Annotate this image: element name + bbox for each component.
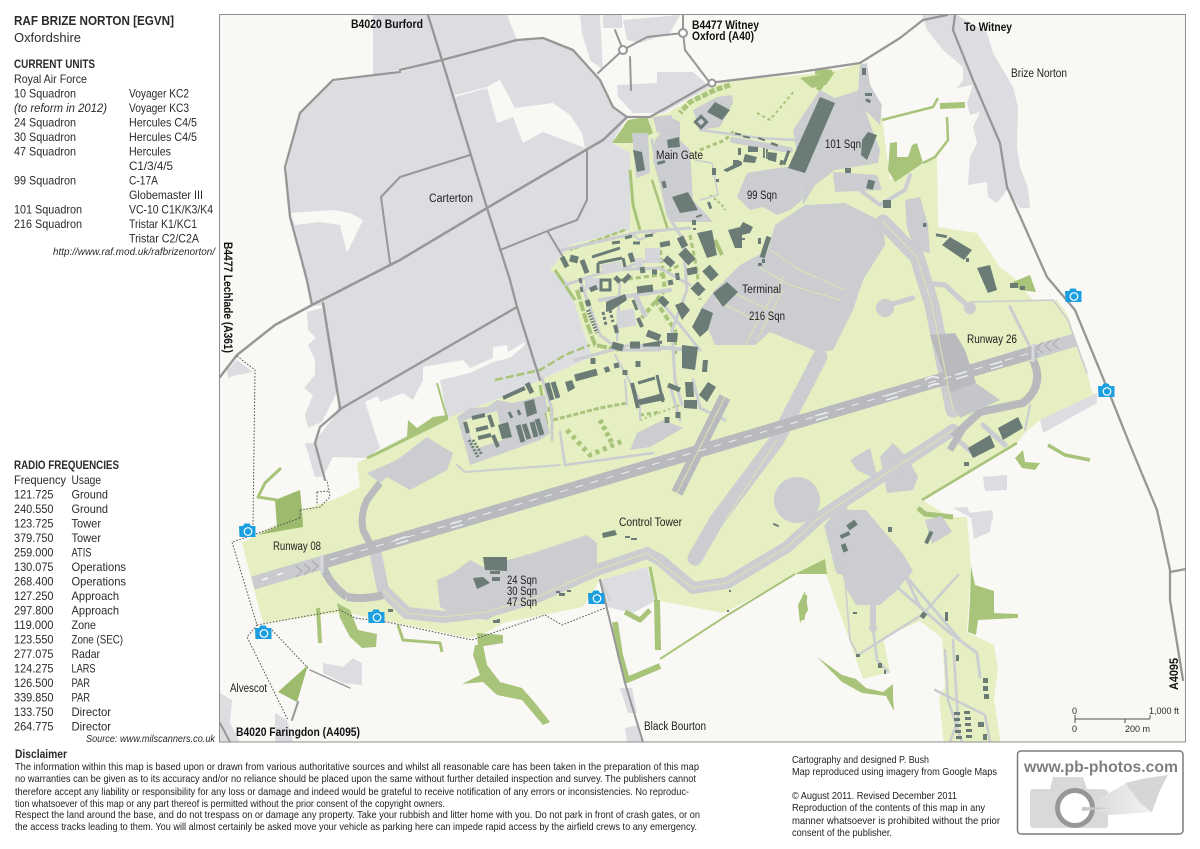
roundabouts [619,29,716,86]
heading: title: Oxfordshire [14,30,81,45]
panel: radio frequencies: Operations [72,574,126,588]
panel: radio frequencies [14,458,216,745]
panel: current units: http://www.raf.mod.uk/rafbrizenorton/ [53,246,216,258]
panel: radio frequencies: Operations [72,560,126,574]
map labels [221,19,1181,739]
panel: radio frequencies: LARS [72,662,96,676]
map labels: To Witney [964,22,1013,34]
panel: radio frequencies: Frequency [14,473,66,487]
panel: current units: Hercules [129,144,171,158]
panel: radio frequencies: 127.250 [14,589,54,603]
map labels: 47 Sqn [507,597,537,609]
panel: current units: 47 Squadron [14,144,76,158]
panel: radio frequencies: Director [72,705,111,719]
panel: radio frequencies: 133.750 [14,705,54,719]
map labels: A4095 [1169,657,1181,690]
panel: current units: Hercules C4/5 [129,130,197,144]
panel: radio frequencies: 264.775 [14,720,54,734]
panel: radio frequencies: Director [72,720,111,734]
panel: current units: Hercules C4/5 [129,116,197,130]
panel: current units: Royal Air Force [14,72,87,86]
map labels: 30 Sqn [507,586,537,598]
panel: radio frequencies: 126.500 [14,676,54,690]
buildings [388,68,1025,740]
urban areas [220,15,1030,742]
clearings in urban areas [290,80,585,448]
text block: disclaimer: Respect the land around the base, and do not trespass on or damage any property. Take your rubbish and litter home with you. Do not park in front of crash gates, or on [15,809,700,821]
text block: disclaimer: Disclaimer [15,747,67,761]
scale bar [1072,708,1179,732]
panel: radio frequencies: Zone [72,618,96,632]
panel: current units: 101 Squadron [14,202,82,216]
panel: current units [14,57,216,258]
heading: title: RAF BRIZE NORTON [EGVN] [14,13,174,28]
panel: radio frequencies: 123.725 [14,516,54,530]
panel: current units: CURRENT UNITS [14,57,95,71]
map labels: Terminal [742,284,781,296]
map labels: 216 Sqn [749,311,785,323]
aprons and taxiways [367,63,976,632]
map labels: Runway 08 [273,541,321,553]
panel: current units: Voyager KC2 [129,86,189,100]
scale bar: 0 [1072,724,1077,734]
panel: radio frequencies: 130.075 [14,560,54,574]
panel: current units: C1/3/4/5 [129,159,173,173]
map labels: Main Gate [656,150,703,162]
map labels: Black Bourton [644,721,706,733]
wooded areas [257,72,1040,725]
roads [220,15,1186,742]
runway [253,338,1075,583]
boundary track [232,356,605,720]
panel: current units: Globemaster III [129,188,203,202]
map labels: B4477 Witney [692,20,760,32]
airfield grass [242,63,1095,745]
map labels: Carterton [429,193,473,205]
panel: radio frequencies: Usage [72,473,101,487]
map labels: Runway 26 [967,334,1017,346]
panel: radio frequencies: Tower [72,531,101,545]
panel: radio frequencies: 277.075 [14,647,54,661]
panel: current units: VC-10 C1K/K3/K4 [129,202,213,216]
panel: radio frequencies: PAR [72,690,90,704]
map labels: B4020 Faringdon (A4095) [236,727,360,739]
map labels: Alvescot [230,683,268,695]
panel: radio frequencies: Ground [72,488,108,502]
text block: credits: Map reproduced using imagery from Google Maps [792,766,997,778]
icon: camera viewpoints [239,288,1114,639]
panel: radio frequencies: 123.550 [14,632,54,646]
scale bar: 200 m [1125,724,1150,734]
text block: credits [792,754,1000,839]
text block: credits: © August 2011. Revised December 2011 [792,790,957,802]
map labels: 101 Sqn [825,139,861,151]
panel: radio frequencies: RADIO FREQUENCIES [14,458,119,472]
text block: disclaimer: no warranties can be given as to its accuracy and/or no reliance should be placed upon the same without further detailed inspection and survey. The publishers cannot [15,773,696,785]
panel: radio frequencies: 119.000 [14,618,54,632]
panel: radio frequencies: 297.800 [14,604,54,618]
panel: current units: (to reform in 2012) [14,101,107,115]
panel: current units: C-17A [129,174,158,188]
panel: radio frequencies: 121.725 [14,488,54,502]
panel: radio frequencies: ATIS [72,546,92,560]
panel: current units: Tristar K1/KC1 [129,217,197,231]
text block: disclaimer: the access tracks leading to them. You will almost certainly be asked move your vehicle as parking here can impede rapid access by the airfield crews to any emergency. [15,821,697,833]
taxiway centre lines [383,222,953,617]
panel: radio frequencies: PAR [72,676,90,690]
panel: current units: 24 Squadron [14,116,76,130]
map labels: 99 Sqn [747,190,777,202]
base building strips [465,116,715,457]
map labels: Oxford (A40) [692,31,754,43]
cross taxiway dark section [323,360,1037,598]
text block: disclaimer: therefore accept any liability or responsibility for any loss or damage and indeed would be grateful to receive notification of any errors or inconsistencies. No reproduc- [15,786,689,798]
panel: current units: 30 Squadron [14,130,76,144]
panel: radio frequencies: 268.400 [14,574,54,588]
panel: radio frequencies: Ground [72,502,108,516]
map labels: Control Tower [619,517,682,529]
panel: radio frequencies: 124.275 [14,662,54,676]
panel: radio frequencies: 339.850 [14,690,54,704]
scale bar: 0 [1072,706,1077,716]
panel: map [220,14,1186,745]
map labels: B4477 Lechlade (A361) [221,242,233,353]
base area hedges [495,130,735,455]
text block: disclaimer [15,747,700,833]
heading: title [14,13,174,45]
panel: current units: 99 Squadron [14,174,76,188]
text block: disclaimer: The information within this map is based upon or drawn from various authoritative sources and whilst all reasonable care has been taken in the preparation of this map [15,761,699,773]
panel: radio frequencies: Approach [72,589,119,603]
scale bar: 1,000 ft [1149,706,1180,716]
panel: radio frequencies: Source: www.milscanners.co.uk [86,733,216,745]
text block: credits: Reproduction of the contents of this map in any [792,802,986,814]
panel: current units: 216 Squadron [14,217,82,231]
map labels: B4020 Burford [351,19,423,31]
panel: radio frequencies: Approach [72,604,119,618]
map labels: Brize Norton [1011,68,1067,80]
panel: current units: 10 Squadron [14,86,76,100]
text block: credits: consent of the publisher. [792,827,892,839]
panel: radio frequencies: 240.550 [14,502,54,516]
panel: current units: Tristar C2/C2A [129,232,199,246]
panel: radio frequencies: Radar [72,647,100,661]
map labels: 24 Sqn [507,575,537,587]
panel: radio frequencies: 379.750 [14,531,54,545]
logo: pb-photos [1018,751,1183,834]
text block: credits: manner whatsoever is prohibited without the prior [792,815,1000,827]
text block: credits: Cartography and designed P. Bush [792,754,929,766]
panel: current units: Voyager KC3 [129,101,189,115]
text block: disclaimer: tion whatsoever of this map or any part thereof is permitted without the prior consent of the copyright owners. [15,798,445,810]
panel: radio frequencies: 259.000 [14,546,54,560]
panel: radio frequencies: Tower [72,516,101,530]
logo: pb-photos: www.pb-photos.com [1023,759,1178,776]
panel: radio frequencies: Zone (SEC) [72,632,123,646]
